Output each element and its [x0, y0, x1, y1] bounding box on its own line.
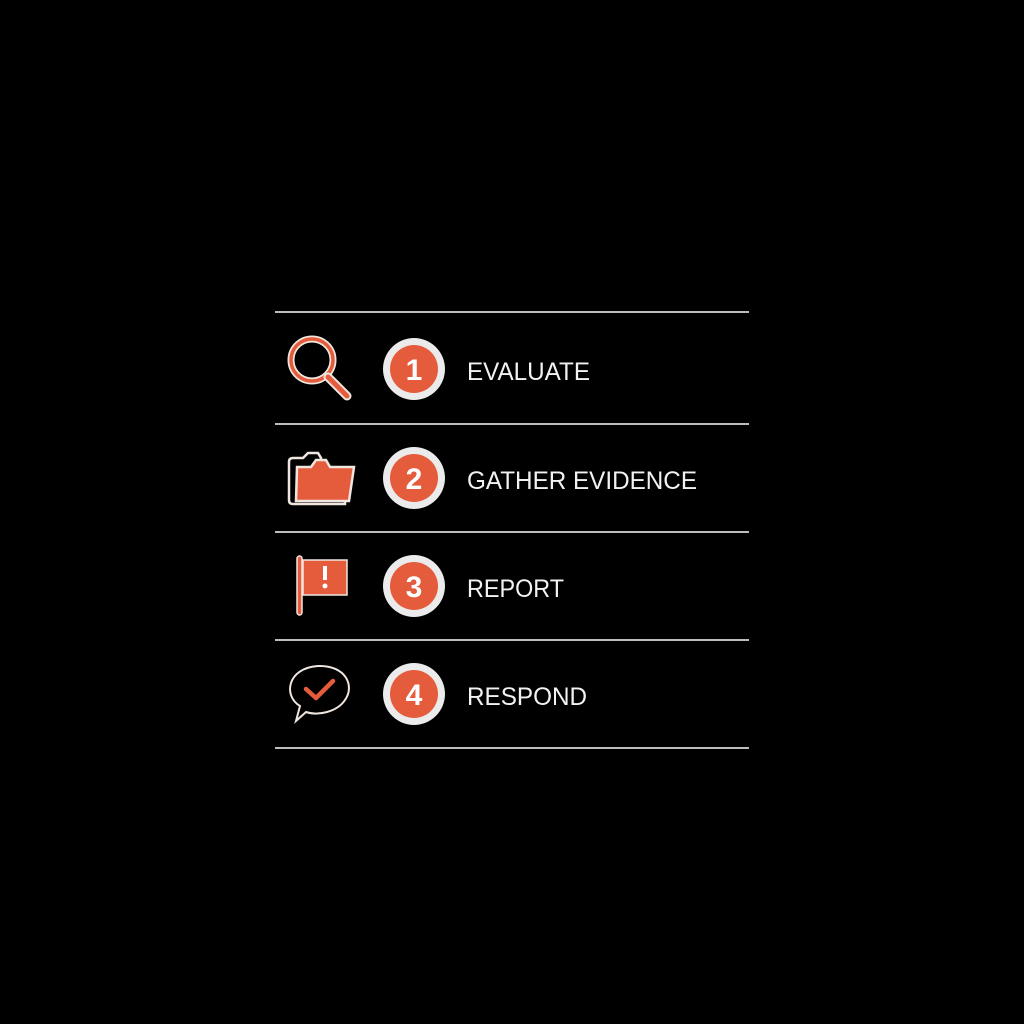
number badge 3: 3 — [406, 571, 422, 604]
icon: magnifier — [291, 339, 347, 396]
label: evaluate: EVALUATE — [467, 358, 590, 386]
row 1: evaluate — [291, 338, 590, 400]
row 2: gather evidence — [289, 447, 697, 509]
number badge 3 — [383, 555, 445, 617]
row 4: respond — [290, 663, 587, 725]
number badge 2: 2 — [406, 463, 422, 496]
icon: flag — [297, 556, 347, 615]
number badge 1 — [383, 338, 445, 400]
label: gather evidence: GATHER EVIDENCE — [467, 467, 697, 495]
label: respond: RESPOND — [467, 683, 587, 711]
number badge 1: 1 — [406, 354, 422, 387]
icon: folder — [289, 453, 354, 504]
number badge 4 — [383, 663, 445, 725]
label: report: REPORT — [467, 575, 564, 603]
number badge 4: 4 — [406, 679, 423, 712]
icon: speech bubble with check — [290, 666, 349, 721]
row 3: report — [297, 555, 564, 617]
number badge 2 — [383, 447, 445, 509]
